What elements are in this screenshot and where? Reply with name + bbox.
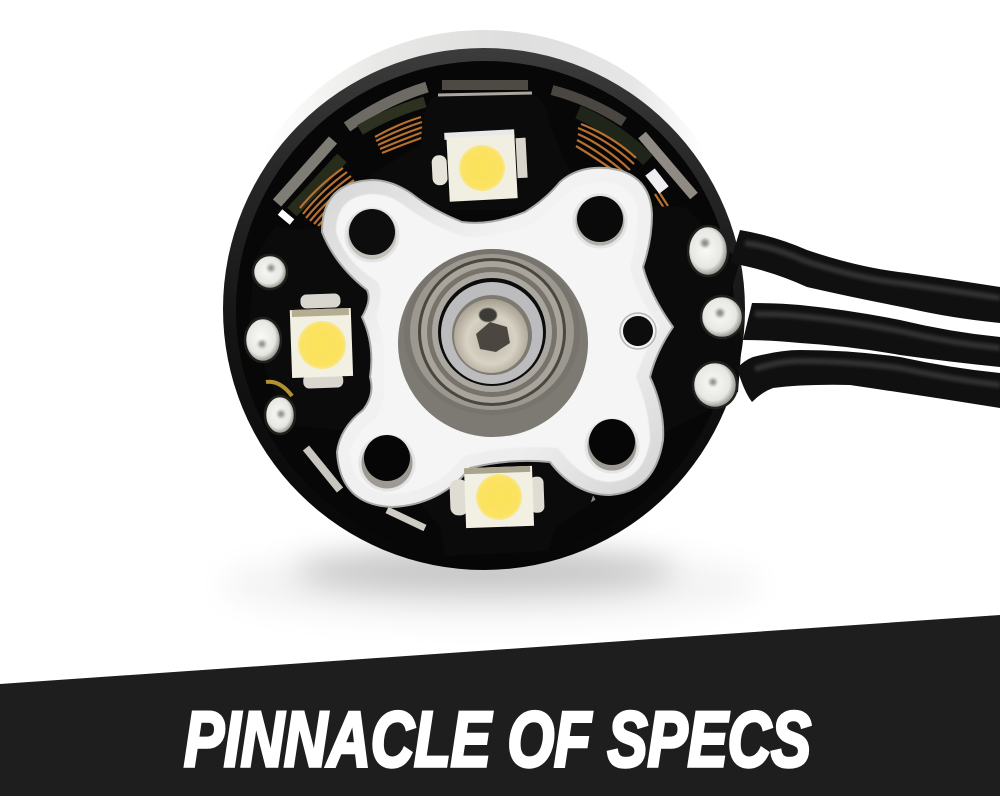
LED: top [430,129,529,203]
copper coils [300,117,668,226]
bottom stator slits [306,448,340,490]
plate inner face [336,182,660,494]
solder specks [258,239,724,418]
ground shadow [220,549,760,621]
motor [222,30,1000,570]
wires [730,230,1000,408]
LED: bottom [449,465,545,529]
hex screw head [454,299,528,373]
LED: left [289,293,353,389]
stator teeth and windings [277,85,694,528]
motor housing [223,48,745,570]
title: PINNACLE OF SPECS [184,695,811,783]
mounting holes [346,195,656,490]
PCB top edge [438,93,532,95]
gold solder tab [266,382,292,396]
motor bell rim [222,30,746,554]
center bearing [398,249,588,437]
screw head shadow spot [479,308,497,322]
wire highlights [745,243,1000,385]
hex socket [476,322,510,352]
solder joints [245,226,743,434]
black banner [0,615,1000,796]
stator interior [236,61,734,559]
mounting plate [322,168,673,507]
PCB arms [248,94,742,556]
